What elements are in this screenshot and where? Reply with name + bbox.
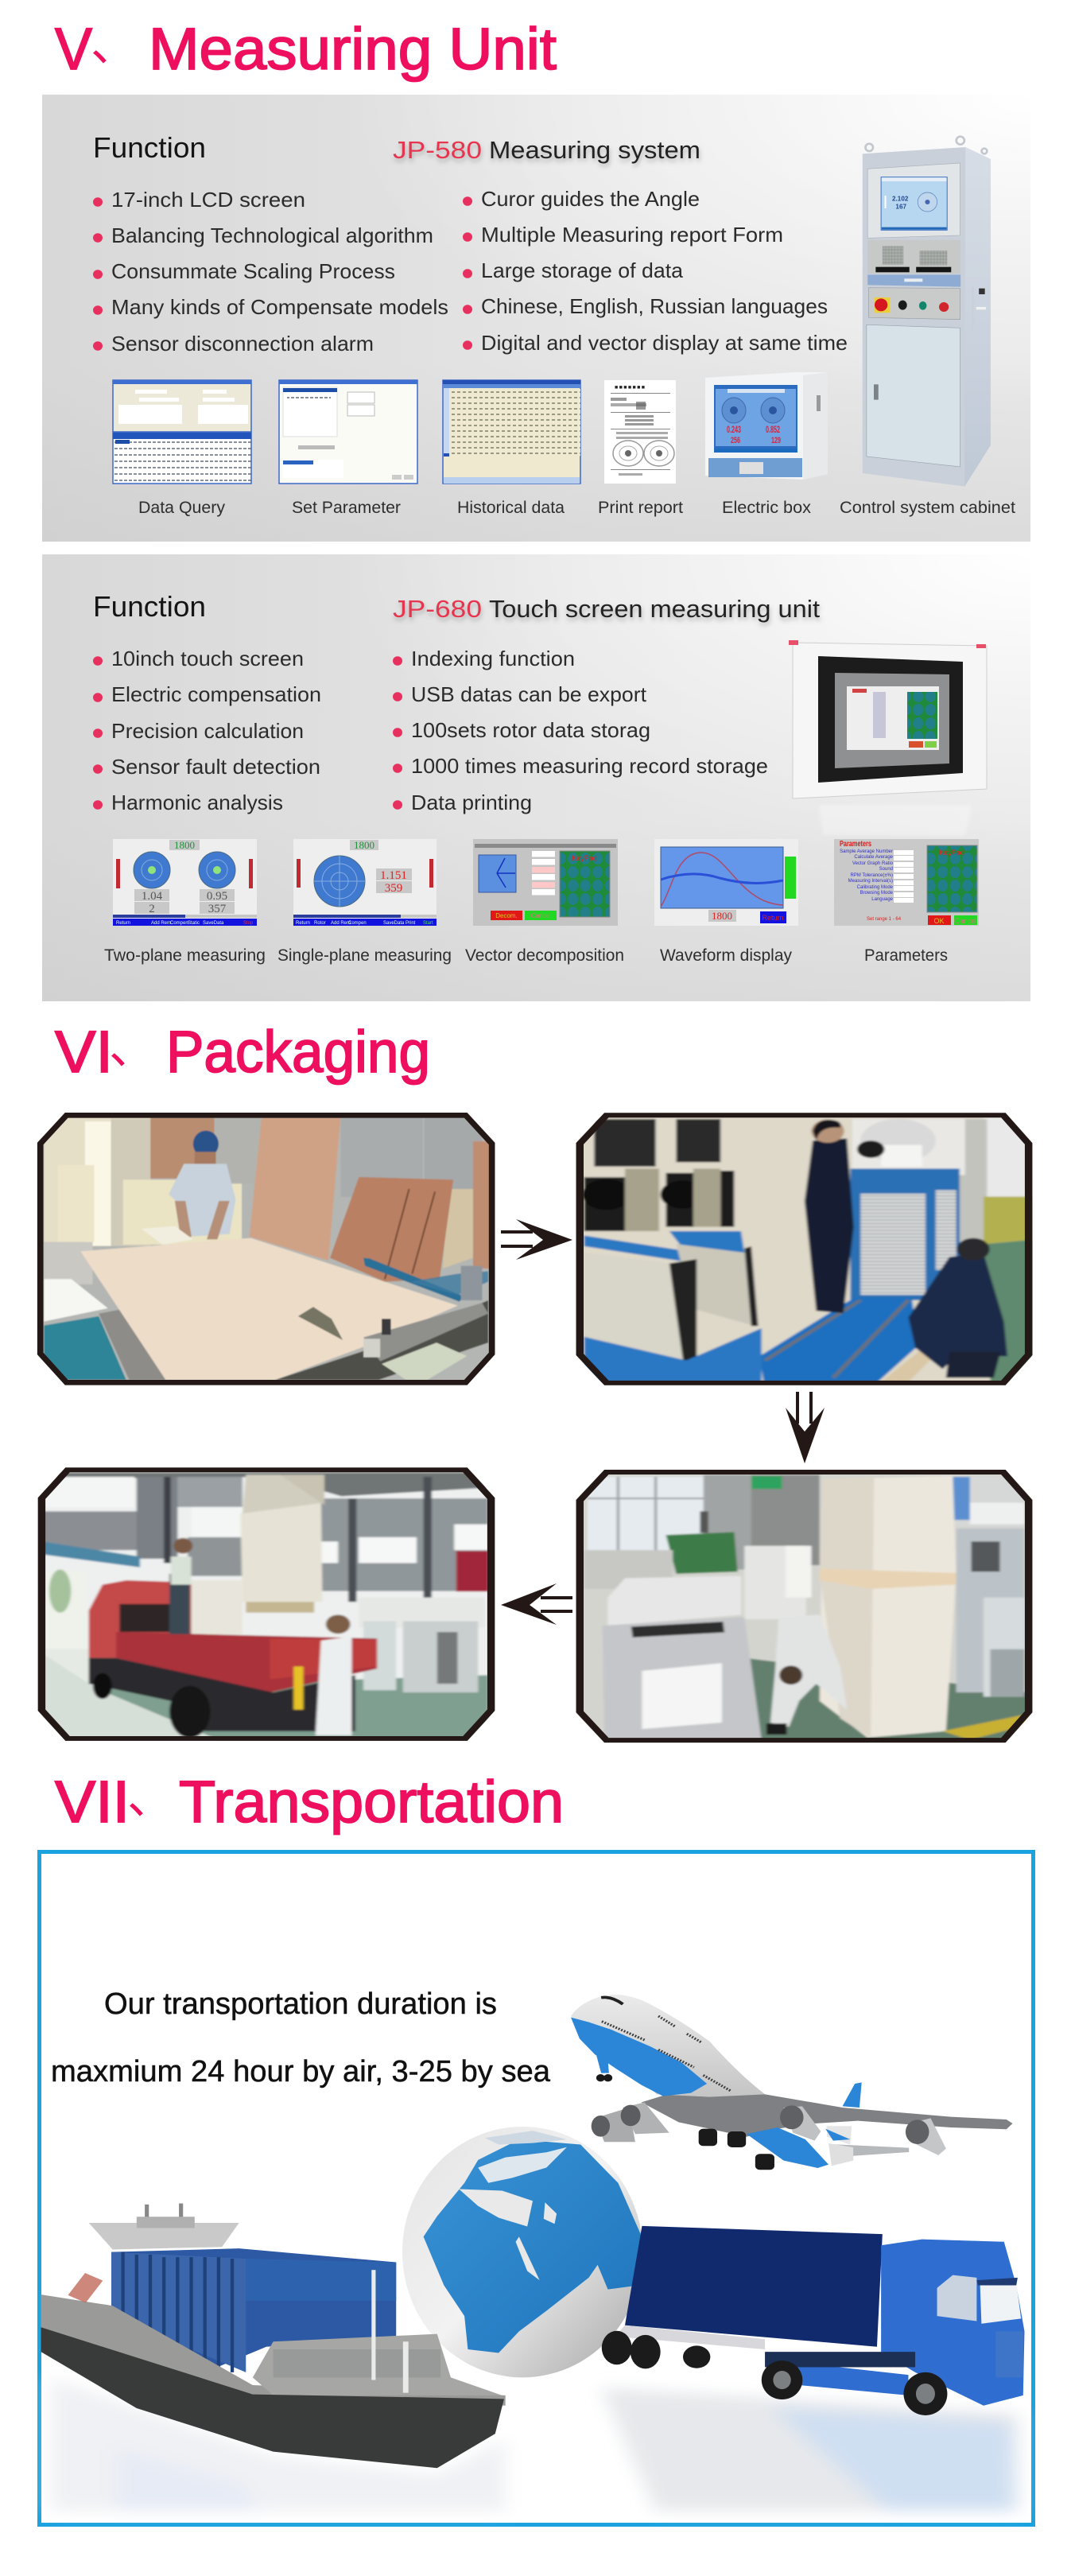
crouching man [908,1253,1007,1369]
screen: Parameters: RPM Tolerance(±%) [850,873,893,878]
screen: Parameters: Language [871,897,894,902]
feature list: right column: 100sets rotor data storag [411,718,650,742]
monitor screen: 167 [895,203,907,210]
screen: Two-plane measuring [113,839,257,926]
feature list: right column: USB datas can be export [411,682,647,706]
touch screen device [789,640,987,835]
screen: Single-plane measuring: Compen [348,921,367,926]
shelf left [584,1550,673,1589]
feature list: left column: Sensor disconnection alarm [111,332,374,356]
deck [41,2294,506,2406]
screen: Two-plane measuring: 357 [208,903,227,915]
feature list: left column: 17-inch LCD screen [111,188,305,212]
feature list: right column: Large storage of data [481,258,684,282]
feature list: left column [93,188,448,356]
feature list: left column: Harmonic analysis [111,791,283,814]
captions for JP-580 screenshots: Print report [598,499,683,517]
captions for JP-580 screenshots: Control system cabinet [840,499,1015,517]
feature list: right column: Data printing [411,791,532,814]
windows [602,2016,731,2091]
electric box: 256 [731,436,740,445]
monitor screen [881,177,947,230]
panel: JP-580 measuring system [42,95,1030,542]
photo: workers fixing balancing machine [576,1113,1034,1386]
tailplane [830,2144,909,2157]
continents [424,2139,641,2353]
title: VI Packaging: Packaging [166,1019,430,1085]
cabinet body [863,147,991,487]
feature list: left column [93,647,321,814]
container [625,2226,883,2347]
feature list: left column: 10inch touch screen [111,647,304,670]
screen: Parameters: Set range 1 - 64 [867,917,902,922]
carton on truck [192,1580,243,1634]
screen: Two-plane measuring: SaveData [203,921,224,926]
rear fuselage [828,2143,853,2166]
screen: Parameters: Sound [879,867,893,872]
cab [881,2240,1024,2406]
trees / left ground [42,1572,87,1649]
monitor panel [867,163,960,238]
lifting rings [865,137,987,153]
captions for JP-680 screens: Two-plane measuring [104,946,266,965]
feature list: left column: Electric compensation [111,682,321,706]
screenshot: Print report [604,380,676,484]
floor reflections [51,2377,1018,2511]
title: V Measuring Unit: Measuring Unit [149,16,557,82]
captions for JP-580 screenshots [138,499,1015,517]
screen: Vector decomposition: KeyPad [572,854,597,862]
captions for JP-580 screenshots: Data Query [138,499,225,517]
wheels [602,2331,947,2415]
screen: Parameters: Measuring Interval(s) [848,879,893,884]
screen: Two-plane measuring: Stop [243,921,254,926]
title: VII Transportation: 、 [127,1772,173,1824]
woman [805,1138,854,1313]
screen: Parameters [834,839,979,926]
screen: Parameters: Calculate Average [854,855,894,860]
feature list: left column: Precision calculation [111,719,304,743]
screenshot: Set Parameter [279,380,417,484]
control system cabinet [863,137,991,487]
feature list: left column: Many kinds of Compensate models [111,295,448,319]
captions for JP-680 screens: Waveform display [660,946,792,965]
engines [592,2102,946,2155]
heading: JP-680 Touch screen measuring unit: Touch screen measuring unit [489,595,820,623]
feature list: right column: 1000 times measuring record storage [411,754,768,778]
heading: JP-580 Measuring system [393,136,700,164]
floor [744,1658,1028,1740]
airplane [571,1995,1013,2170]
man on ground [316,1637,351,1735]
screen: Parameters: Sample Average Number [840,849,893,854]
screen: Vector decomposition [473,839,618,926]
screen: Parameters: KeyPad [939,849,964,857]
screen: Parameters: Browsing Mode [860,891,894,896]
title: VII Transportation: VII [55,1769,130,1835]
text: transportation duration [51,1987,551,2088]
screen: Two-plane measuring: Add Rem [151,921,171,926]
captions for JP-580 screenshots: Set Parameter [292,499,401,517]
feature list: left column: Consummate Scaling Process [111,259,395,283]
panel: JP-680 touch screen measuring unit [42,554,1030,1001]
screen: Two-plane measuring: 0.95 [207,890,227,903]
buttons panel [869,288,960,320]
screen: Single-plane measuring: 1800 [354,839,374,851]
heading: Function: Function [93,590,206,623]
feature list: right column [393,647,768,814]
cabinets behind truck [363,1622,396,1690]
photo: packed machine wrapped in wood [576,1470,1034,1743]
green milling machine [666,1532,738,1574]
title: VI Packaging: 、 [109,1022,155,1074]
screenshot: Print report: ■■■■■■■ [615,385,645,390]
tail fin [843,2082,862,2108]
right machine [957,1529,1024,1692]
screen: Two-plane measuring: Compen [170,921,188,926]
screen: Single-plane measuring: Return [296,921,310,926]
screen: Two-plane measuring: 1800 [174,839,195,851]
man on truck [169,1574,190,1634]
electric box [705,372,828,480]
screen: Two-plane measuring: Return [116,921,130,926]
screen: Parameters: Calibrating Mode [857,885,894,890]
hull [41,2327,504,2468]
photo: loading machine onto truck [37,1467,495,1741]
rotor supports [594,1119,656,1167]
text: transportation duration: maxmium 24 hour by air, 3-25 by sea [51,2055,551,2088]
title: VI Packaging: VI [55,1019,113,1085]
feature list: right column [463,187,848,355]
screen: Single-plane measuring: Start [423,921,433,926]
white machine top [608,1576,741,1626]
feature list: right column: Digital and vector display at same time [481,331,848,355]
electric box: 0.243 [727,424,741,435]
screen: Single-plane measuring: Add Rem [331,921,351,926]
electric box: 0.852 [766,424,780,435]
captions for JP-680 screens: Single-plane measuring [277,946,452,965]
screen: Parameters: Vector Graph Ratio [852,861,894,866]
text: transportation duration: Our transportation duration is [104,1987,497,2021]
globe [402,2127,642,2377]
feature list: right column: Indexing function [411,647,575,670]
panel: transportation [40,1851,1034,2524]
captions for JP-680 screens [104,946,948,965]
feature list: right column: Chinese, English, Russian languages [481,294,828,318]
truck [602,2226,1024,2415]
screen: Vector decomposition: Cancel [531,912,551,919]
blue strip [867,274,960,287]
rack computers [867,240,960,274]
screen: Waveform display [654,839,798,926]
screen: Parameters: Cancel [954,917,976,925]
electric box: 129 [771,436,781,445]
screenshot: Data Query [113,380,251,484]
captions for JP-580 screenshots: Electric box [722,499,812,517]
photo: cutting plywood board [37,1113,495,1385]
superstructure [89,2204,239,2249]
cabinet door [867,324,960,467]
title: VI Packaging [55,1019,430,1085]
arrow: step 3 to step 4 [501,1583,572,1625]
screen: Single-plane measuring: Print [406,921,416,926]
heading: Function: Function [93,131,206,164]
title: V Measuring Unit: V [55,16,93,82]
title: VII Transportation: Transportation [179,1769,564,1835]
heading: JP-580 Measuring system: Measuring system [489,136,700,164]
fuselage upper [571,1995,765,2097]
screen: Two-plane measuring: Static [188,921,200,926]
containers [111,2248,396,2372]
screenshot: Historical data [443,380,580,484]
screen: Parameters: Parameters [840,840,871,849]
cargo ship [41,2204,506,2468]
screen: Single-plane measuring [293,839,437,926]
blue base rail [759,1298,918,1382]
crate [820,1476,957,1738]
feature list: left column: Sensor fault detection [111,755,320,779]
screen: Parameters: OK [933,917,945,925]
screen: Single-plane measuring: Rotor [314,921,326,926]
hoisted machine [240,1496,322,1602]
bending worker [770,1614,847,1727]
arrow: step 2 to step 3 [786,1392,825,1463]
screen: Two-plane measuring: 2 [149,903,155,915]
heading: JP-680 Touch screen measuring unit: JP-680 [393,595,482,623]
floor [89,1675,488,1740]
frame [41,1115,492,1382]
fuselage blue belly [571,2018,707,2096]
title: V Measuring Unit: 、 [91,19,137,71]
feature list: right column: Multiple Measuring report Form [481,223,783,247]
arrow: step 1 to step 2 [501,1219,572,1260]
feature list: right column: Curor guides the Angle [481,187,700,211]
screen: Single-plane measuring: SaveData [383,921,405,926]
screen: Single-plane measuring: 1.151 [380,869,407,882]
screen: Single-plane measuring: 359 [385,882,402,895]
worker [169,1164,235,1237]
captions for JP-580 screenshots: Historical data [457,499,565,517]
screen: Two-plane measuring: 1.04 [142,890,163,903]
heading: JP-580 Measuring system: JP-580 [393,136,482,164]
screen: Waveform display: 1800 [712,910,732,922]
captions for JP-680 screens: Vector decomposition [465,946,624,965]
truck [89,1580,192,1658]
captions for JP-680 screens: Parameters [864,946,948,965]
screen: Vector decomposition: Decom. [495,912,518,919]
gray machine body [603,1617,762,1740]
monitor screen: 2.102 [892,195,909,202]
landing gear [596,2074,774,2170]
wings [642,2089,1013,2137]
feature list: left column: Balancing Technological algorithm [111,223,433,247]
screen: Waveform display: Return [762,914,784,922]
chassis [615,2325,765,2349]
